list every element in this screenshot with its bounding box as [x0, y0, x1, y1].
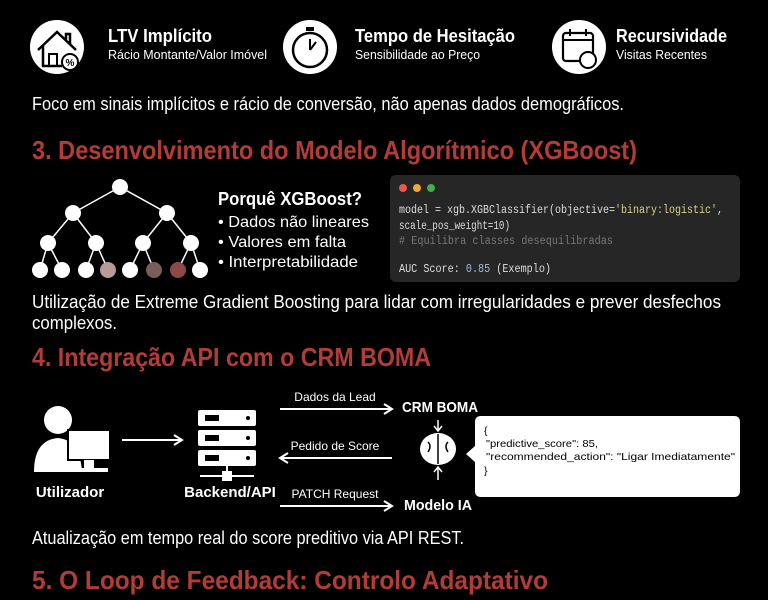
icon: user at computer: [34, 406, 110, 501]
callout: JSON response: [466, 416, 740, 497]
icon: brain: [420, 420, 456, 480]
icon: stopwatch: [283, 20, 337, 74]
callout: JSON response: "predictive_score": 85,: [486, 438, 598, 450]
heading 5: 5. O Loop de Feedback: Controlo Adaptativo: [32, 565, 548, 595]
code panel: # Equilibra classes desequilibradas: [399, 235, 613, 248]
feature: Recursividade: Visitas Recentes: [616, 47, 707, 62]
icon: user at computer: Utilizador: [36, 484, 104, 501]
feature: Tempo de Hesitação: Sensibilidade ao Preço: [355, 47, 480, 62]
code panel: model = xgb.XGBClassifier(objective='binary:logistic',: [399, 204, 723, 217]
feature: Recursividade: Recursividade: [616, 26, 727, 46]
arrow: dados da lead: Dados da Lead: [294, 390, 376, 404]
text: Porquê XGBoost list: • Dados não lineares: [218, 214, 369, 231]
arrow: dados da lead: [280, 390, 392, 414]
text: utilização: complexos.: [32, 313, 117, 333]
text: utilização: [32, 292, 721, 333]
arrow: pedido de score: Pedido de Score: [291, 439, 380, 453]
label: CRM BOMA: CRM BOMA: [402, 399, 478, 416]
feature: Tempo de Hesitação: [355, 26, 515, 62]
text: utilização: Utilização de Extreme Gradient Boosting para lidar com irregularidades e prever desfechos: [32, 292, 721, 312]
text: atualização: Atualização em tempo real do score preditivo via API REST.: [32, 528, 464, 548]
code panel: scale_pos_weight=10): [399, 220, 510, 233]
heading 4: 4. Integração API com o CRM BOMA: [32, 342, 431, 372]
text: Porquê XGBoost list: Porquê XGBoost?: [218, 189, 362, 209]
label: Modelo IA: Modelo IA: [404, 497, 472, 514]
feature: LTV Implícito: LTV Implícito: [108, 26, 212, 46]
feature: Tempo de Hesitação: Tempo de Hesitação: [355, 26, 515, 46]
callout: JSON response: "recommended_action": "Ligar Imediatamente": [486, 451, 735, 463]
text: foco: Foco em sinais implícitos e rácio de conversão, não apenas dados demográficos.: [32, 94, 624, 114]
tree diagram: [32, 179, 208, 278]
icon: calendar: [552, 20, 606, 74]
arrow: user to backend: [122, 435, 182, 445]
icon: server: Backend/API: [184, 484, 276, 501]
callout: JSON response: }: [484, 465, 488, 477]
text: Porquê XGBoost list: • Valores em falta: [218, 234, 346, 251]
text: Porquê XGBoost list: [218, 189, 369, 271]
arrow: patch request: [280, 487, 392, 511]
icon: server: [184, 410, 276, 501]
code panel: AUC Score: 0.85 (Exemplo): [399, 263, 551, 276]
icon: house LTV: %: [66, 58, 75, 69]
code panel: [390, 175, 740, 282]
arrow: pedido de score: [280, 439, 392, 463]
icon: house LTV: [30, 20, 84, 74]
text: Porquê XGBoost list: • Interpretabilidade: [218, 254, 358, 271]
heading 3: 3. Desenvolvimento do Modelo Algorítmico (XGBoost): [32, 135, 637, 165]
arrow: patch request: PATCH Request: [292, 487, 379, 501]
feature: LTV Implícito: [108, 26, 267, 62]
feature: Recursividade: [616, 26, 727, 62]
feature: LTV Implícito: Rácio Montante/Valor Imóvel: [108, 47, 267, 62]
callout: JSON response: {: [484, 425, 488, 437]
